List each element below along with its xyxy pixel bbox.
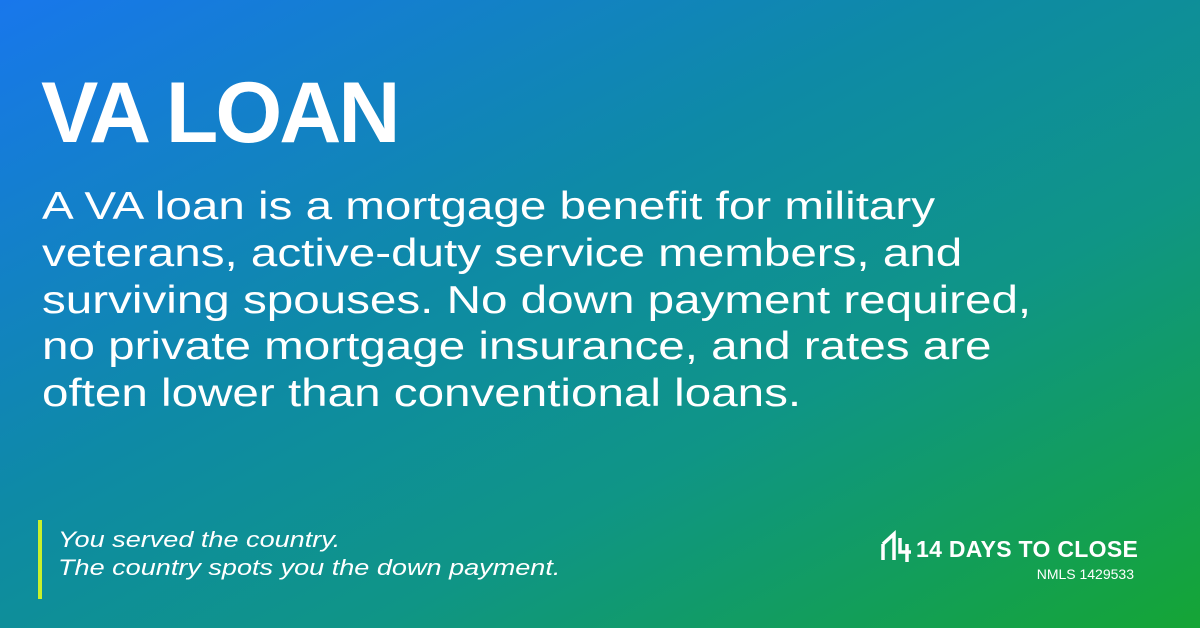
quote accent bar <box>38 520 42 599</box>
icon: house 14 <box>881 530 911 562</box>
description text: surviving spouses. No down payment required, <box>42 279 1031 322</box>
description text: veterans, active-duty service members, and <box>42 232 962 275</box>
quote text <box>58 527 560 580</box>
NMLS: NMLS 1429533 <box>1037 566 1134 582</box>
quote text: You served the country. <box>58 527 340 552</box>
quote text: The country spots you the down payment. <box>58 555 560 580</box>
title: VA LOAN <box>41 65 397 161</box>
logo <box>881 530 1138 582</box>
description text: no private mortgage insurance, and rates are <box>42 325 992 368</box>
description text: A VA loan is a mortgage benefit for military <box>42 185 935 228</box>
description text: often lower than conventional loans. <box>42 372 801 415</box>
description text <box>42 185 1031 415</box>
logo text: 14 DAYS TO CLOSE <box>916 536 1138 562</box>
